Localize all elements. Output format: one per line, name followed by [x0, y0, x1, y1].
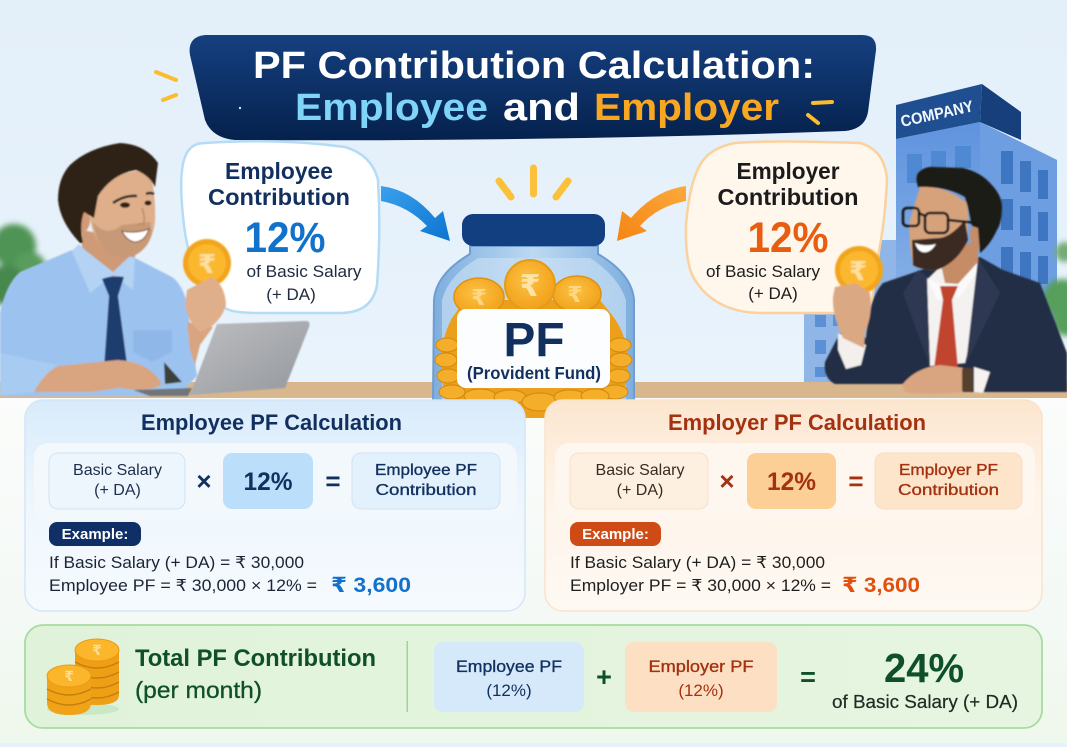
title line 2 — [295, 87, 779, 129]
multiply sign: × — [719, 466, 735, 496]
callout: employee contribution: Contribution — [208, 184, 350, 210]
company building — [804, 84, 1057, 382]
employee tie — [102, 276, 127, 368]
example lines: If Basic Salary (+ DA) = ₹ 30,000 — [570, 554, 825, 572]
coin held by employer — [835, 246, 883, 294]
panel: employee PF calculation — [25, 400, 525, 611]
employee desk forearm and hand — [34, 360, 162, 392]
arrow: employer to jar — [617, 186, 686, 241]
result box: Contribution — [376, 482, 476, 499]
title line 2: Employer — [594, 87, 779, 129]
laptop — [133, 321, 310, 396]
left tree — [0, 224, 46, 305]
panel heading: Employer PF Calculation — [668, 410, 926, 435]
lower background building — [804, 240, 898, 382]
employer collar — [927, 258, 978, 300]
example badge — [49, 522, 141, 546]
callout: employee contribution: (+ DA) — [266, 285, 316, 304]
employee share box — [434, 642, 584, 712]
employer ear — [970, 222, 986, 248]
title line 2: Employee — [295, 87, 488, 129]
jar label — [457, 309, 610, 388]
employee pocket shade — [133, 330, 172, 362]
employer right lapel — [966, 258, 1000, 364]
example badge: Example: — [62, 526, 128, 543]
total heading: Total PF Contribution — [135, 645, 376, 672]
coins in jar: ₹ — [520, 270, 540, 303]
callout percentage: 12% — [748, 214, 828, 262]
employer hair — [916, 167, 1002, 253]
example badge: Example: — [582, 526, 649, 543]
icon: coin stacks: ₹ — [92, 642, 102, 658]
panel: employer PF calculation: Employer PF = ₹ 30,000 × 12% = — [570, 577, 831, 595]
employer glasses — [903, 208, 977, 233]
basic salary box — [570, 453, 708, 509]
callout: employer contribution: Contribution — [718, 184, 858, 210]
total detail: of Basic Salary (+ DA) — [832, 692, 1018, 712]
provident fund text: (Provident Fund) — [467, 363, 601, 383]
icon: coin stacks — [47, 639, 119, 715]
employee collar — [72, 244, 135, 293]
coins in jar: ₹ — [567, 282, 583, 307]
employer shirt — [927, 258, 980, 366]
title line 1: PF Contribution Calculation: — [253, 45, 815, 87]
result box: Employee PF — [375, 462, 477, 479]
total percentage: 24% — [884, 645, 964, 691]
employee dark gap under arm — [164, 362, 182, 384]
equals sign: = — [848, 466, 864, 496]
employee raised forearm — [187, 322, 213, 365]
jar glass body — [433, 246, 634, 400]
rate box: 12% — [244, 468, 292, 496]
callout detail: of Basic Salary — [706, 262, 820, 281]
tower roof sign — [896, 84, 982, 139]
panel heading: Employee PF Calculation — [141, 410, 402, 435]
callout detail: of Basic Salary — [246, 262, 362, 281]
rays above jar — [499, 168, 568, 197]
example result: ₹ 3,600 — [842, 574, 920, 597]
result box: Employer PF — [899, 462, 998, 479]
equals sign: = — [325, 466, 341, 496]
employee torso and shirt — [0, 250, 197, 396]
employer share box: Employer PF — [648, 657, 754, 676]
basic salary box: (+ DA) — [94, 482, 141, 499]
callout heading: Employee — [225, 158, 333, 184]
coins in jar: ₹ — [471, 285, 487, 310]
employee neck — [82, 230, 135, 278]
basic salary box: Basic Salary — [73, 462, 162, 479]
company sign text: COMPANY — [899, 98, 975, 131]
rate box: 12% — [767, 468, 816, 496]
example result: ₹ 3,600 — [331, 574, 411, 597]
tower windows — [907, 146, 1048, 284]
employer suit — [825, 257, 1067, 392]
title line 2: and — [503, 87, 580, 129]
result box: Contribution — [898, 482, 999, 499]
employee share box: (12%) — [486, 681, 532, 700]
employer mouth — [915, 243, 936, 252]
panel: employer PF calculation — [545, 400, 1042, 611]
example lines: If Basic Salary (+ DA) = ₹ 30,000 — [49, 554, 304, 572]
result box — [875, 453, 1022, 509]
equals sign: = — [800, 662, 816, 692]
callout heading: Employer — [736, 158, 840, 184]
result box — [352, 453, 500, 509]
sparkle accents — [156, 72, 832, 123]
employer face — [909, 187, 968, 270]
basic salary box: (+ DA) — [617, 482, 663, 499]
title banner — [190, 35, 876, 140]
main tower faces — [896, 122, 1057, 330]
employee stubble — [93, 222, 152, 257]
employer watch — [962, 368, 973, 392]
employee hair — [58, 143, 158, 243]
employer left lapel — [903, 270, 930, 366]
employee left sleeve — [0, 353, 58, 396]
employer share box — [625, 642, 777, 712]
employee face details — [113, 193, 154, 242]
employer hand — [833, 283, 871, 348]
coin held by employee: ₹ — [198, 249, 216, 279]
callout: employee contribution — [181, 141, 379, 313]
employee share box: Employee PF — [456, 657, 562, 676]
arrow: employee to jar — [381, 186, 450, 241]
employee face — [90, 170, 155, 257]
multiply sign: × — [196, 466, 212, 496]
PF jar — [433, 214, 634, 418]
right tree — [1043, 242, 1067, 336]
plus sign: + — [596, 662, 612, 692]
icon: coin stacks: ₹ — [64, 668, 74, 684]
coin held by employee — [183, 239, 231, 287]
formula row — [555, 443, 1035, 519]
employer beard — [912, 220, 968, 270]
example badge — [570, 522, 661, 546]
jar lid — [462, 214, 605, 246]
coin held by employer: ₹ — [849, 256, 867, 286]
employee hand — [185, 277, 226, 332]
employee ear — [72, 207, 90, 233]
total subheading: (per month) — [135, 677, 262, 703]
employer desk hand — [902, 365, 964, 394]
rate box — [747, 453, 836, 509]
panel: employee PF calculation: Employee PF = ₹ 30,000 × 12% = — [49, 577, 317, 595]
employee figure — [0, 143, 310, 396]
basic salary box — [49, 453, 185, 509]
callout: employer contribution — [686, 142, 887, 313]
formula row — [34, 443, 517, 519]
employer cuff — [838, 333, 866, 369]
desk — [0, 382, 1067, 399]
employer neck — [940, 240, 978, 284]
callout: employer contribution: (+ DA) — [748, 284, 798, 303]
basic salary box: Basic Salary — [596, 462, 684, 479]
rate box — [223, 453, 313, 509]
employer cuff at watch — [974, 367, 990, 393]
employer figure — [825, 167, 1067, 394]
coins in jar — [435, 260, 632, 418]
employer share box: (12%) — [678, 681, 724, 700]
lower page background — [0, 398, 1067, 743]
callout percentage: 12% — [244, 214, 326, 262]
PF text: PF — [504, 314, 564, 367]
panel: total PF contribution — [25, 625, 1042, 728]
employer tie — [934, 286, 958, 368]
